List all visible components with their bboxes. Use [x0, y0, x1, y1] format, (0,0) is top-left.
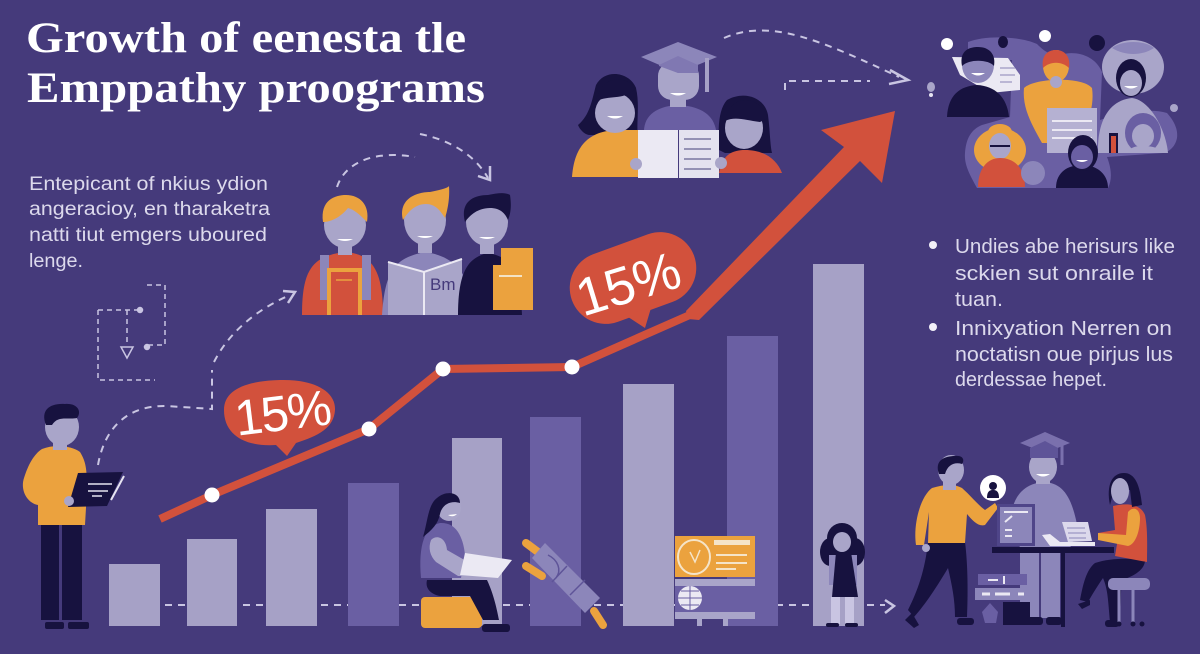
illustration: woman sitting on stool with paper [420, 493, 512, 632]
illustration: standing girl [820, 523, 865, 627]
intro text block: Entepicant of nkius ydion [29, 174, 268, 195]
bullet list: Undies abe herisurs like [955, 235, 1175, 258]
intro text block: natti tiut emgers uboured [29, 225, 267, 246]
illustration: three kids reading [302, 186, 533, 315]
illustration: community portrait cluster [927, 30, 1178, 188]
bullet list: Innixyation Nerren on [955, 317, 1172, 340]
illustration: team working at table [905, 432, 1150, 628]
bullet list [929, 235, 1175, 391]
intro text block: lenge. [29, 251, 83, 272]
intro text block [29, 174, 270, 272]
title [26, 15, 485, 112]
dashed baseline arrow [165, 600, 894, 613]
bullet list: noctatisn oue pirjus lus [955, 343, 1173, 366]
title: Emppathy proograms [27, 65, 485, 112]
illustration: graduate group with open book [572, 42, 782, 178]
illustration: man with tablet [23, 404, 124, 629]
bullet list: derdessae hepet. [955, 368, 1107, 391]
bullet list: sckien sut onraile it [955, 262, 1153, 285]
illustration: rolled tool [526, 543, 603, 625]
illustration: three kids reading: Bm [430, 275, 456, 294]
callout: 15% right: 15% [569, 241, 688, 328]
title: Growth of eenesta tle [26, 15, 466, 62]
illustration: clock card and globe panel [675, 536, 755, 626]
bullet list: tuan. [955, 288, 1003, 311]
callout: 15% right [560, 222, 706, 334]
intro text block: angeracioy, en tharaketra [29, 199, 270, 220]
growth trend line with arrow [160, 111, 895, 519]
callout: 15% left: 15% [232, 379, 335, 447]
dashed connector arrows [98, 30, 908, 465]
icon: dashed flow diagram [98, 285, 165, 380]
bar chart [109, 264, 864, 626]
